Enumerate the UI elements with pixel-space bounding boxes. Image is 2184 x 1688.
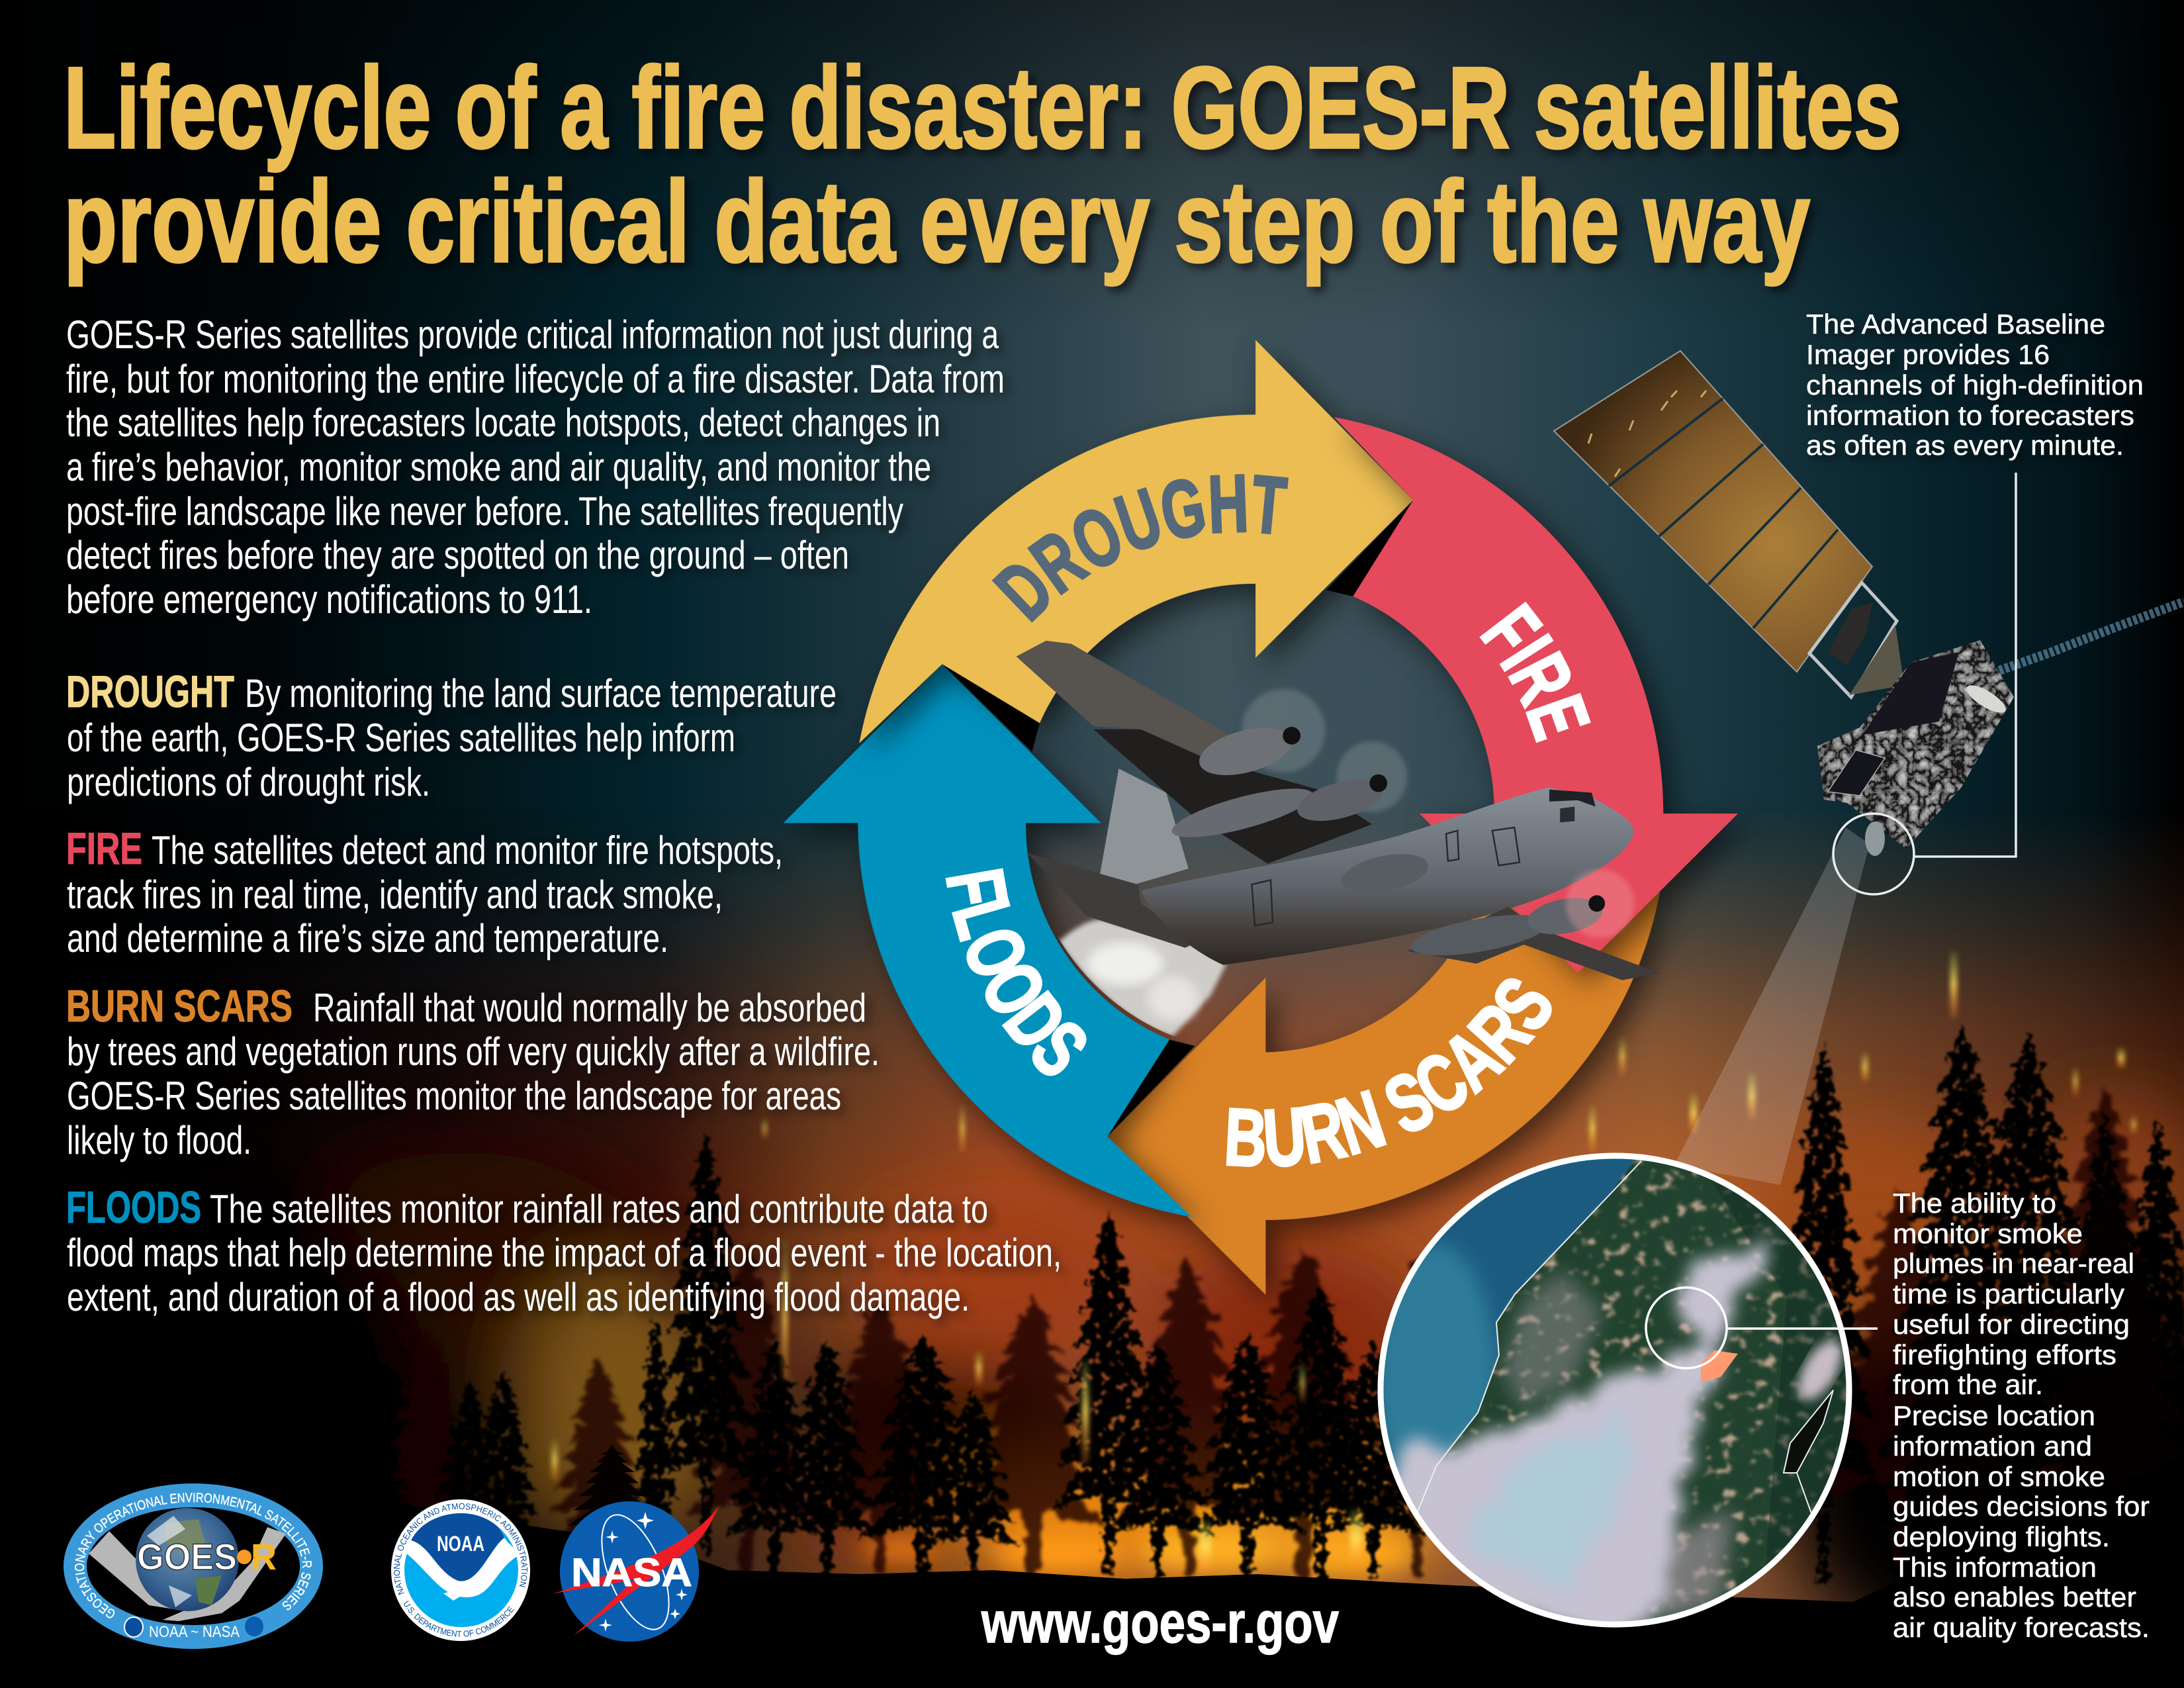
text block: burn scars: Rainfall that would normally be absorbed: [313, 986, 866, 1030]
satellite view of smoke plume: [1377, 1152, 1878, 1635]
arrow: drought: [859, 340, 1413, 743]
intro paragraph: GOES-R Series satellites provide critical information not just during a: [66, 312, 999, 357]
text block: floods: extent, and duration of a flood as well as identifying flood damage.: [67, 1275, 970, 1319]
arrow: burn scars: [1107, 880, 1660, 1295]
logo: goes-r: GEOSTATIONARY OPERATIONAL ENVIRONMENTAL SATELLITE-R SERIES: [73, 1491, 314, 1621]
callout: smoke plume monitoring: [1893, 1188, 2150, 1643]
callout: smoke plume monitoring: information and: [1893, 1430, 2092, 1462]
logo: nasa: [553, 1501, 719, 1642]
text block: drought: predictions of drought risk.: [67, 760, 430, 804]
callout: advanced baseline imager: channels of high-definition: [1806, 369, 2144, 400]
intro paragraph: a fire’s behavior, monitor smoke and air quality, and monitor the: [66, 445, 931, 489]
callout: smoke plume monitoring: plumes in near-real: [1893, 1248, 2134, 1279]
satellite solar array: [1554, 351, 1872, 672]
callout: smoke plume monitoring: Precise location: [1893, 1400, 2095, 1431]
text block: burn scars: [66, 981, 880, 1162]
callout: advanced baseline imager: as often as every minute.: [1806, 430, 2124, 461]
text block: drought: By monitoring the land surface temperature: [245, 671, 837, 716]
callout: smoke plume monitoring: from the air.: [1893, 1369, 2043, 1400]
website url: www.goes-r.gov: [981, 1591, 1339, 1655]
callout: advanced baseline imager: information to forecasters: [1806, 400, 2134, 431]
text block: floods: FLOODS: [66, 1182, 201, 1233]
text block: floods: flood maps that help determine the impact of a flood event - the location,: [67, 1231, 1062, 1275]
callout: smoke plume monitoring: useful for directing: [1893, 1309, 2130, 1340]
callout: smoke plume monitoring: also enables better: [1893, 1581, 2136, 1613]
intro paragraph: before emergency notifications to 911.: [66, 577, 592, 622]
callout: advanced baseline imager: Imager provides 16: [1806, 339, 2050, 370]
label: fire: FIRE: [1465, 589, 1607, 749]
text block: drought: [66, 667, 837, 804]
logo: noaa: NATIONAL OCEANIC AND ATMOSPHERIC ADMINISTRATION: [392, 1501, 529, 1596]
text block: burn scars: likely to flood.: [67, 1118, 251, 1162]
callout: smoke plume monitoring: time is particularly: [1893, 1278, 2124, 1309]
cycle ring of four arrows: [783, 340, 1738, 1295]
intro paragraph: [66, 312, 1005, 622]
arrow: floods: [783, 664, 1191, 1217]
callout: smoke plume monitoring: motion of smoke: [1893, 1461, 2105, 1492]
text block: burn scars: by trees and vegetation runs off very quickly after a wildfire.: [67, 1029, 880, 1074]
logo: goes-r: GOES: [137, 1536, 237, 1577]
text block: drought: DROUGHT: [66, 667, 234, 717]
logo: goes-r: NOAA ~ NASA: [149, 1623, 240, 1641]
callout: smoke plume monitoring: air quality forecasts.: [1893, 1612, 2150, 1643]
label: floods: FLOODS: [929, 863, 1105, 1094]
intro paragraph: the satellites help forecasters locate hotspots, detect changes in: [66, 400, 940, 445]
text block: floods: [66, 1182, 1062, 1319]
arrow: shadow wedges: [942, 500, 1413, 1137]
text block: fire: track fires in real time, identify and track smoke,: [67, 872, 723, 917]
callout: advanced baseline imager: The Advanced Baseline: [1806, 308, 2105, 340]
satellite body and antenna boom: [1809, 583, 2184, 856]
label: drought: DROUGHT: [991, 474, 1289, 623]
callout: smoke plume monitoring: monitor smoke: [1893, 1218, 2083, 1249]
logo: noaa: U.S. DEPARTMENT OF COMMERCE: [401, 1599, 516, 1639]
text block: fire: [66, 823, 783, 961]
text block: drought: of the earth, GOES-R Series satellites help inform: [67, 716, 735, 760]
label: burn scars: BURN SCARS: [1222, 961, 1571, 1184]
arrow: fire: [1334, 417, 1738, 973]
title: [64, 44, 1901, 287]
intro paragraph: fire, but for monitoring the entire lifecycle of a fire disaster. Data from: [66, 357, 1005, 401]
logo: noaa: NOAA: [437, 1532, 484, 1556]
beam from imager to satellite view: [1674, 827, 1870, 1185]
intro paragraph: detect fires before they are spotted on the ground – often: [66, 533, 849, 577]
text block: floods: The satellites monitor rainfall rates and contribute data to: [210, 1187, 988, 1231]
text block: fire: FIRE: [66, 823, 142, 874]
callout: advanced baseline imager: [1806, 308, 2144, 461]
firefighting aircraft dropping retardant: [1017, 641, 1660, 1037]
callout: smoke plume monitoring: deploying flights.: [1893, 1521, 2110, 1552]
logo: noaa: [391, 1499, 530, 1641]
callout: smoke plume monitoring: The ability to: [1893, 1188, 2056, 1219]
text block: fire: and determine a fire’s size and temperature.: [67, 916, 668, 961]
logo: nasa: NASA: [571, 1550, 692, 1595]
callout: smoke plume monitoring: guides decisions for: [1893, 1491, 2150, 1522]
leader line and imager circle: [1833, 473, 2016, 894]
callout: smoke plume monitoring: firefighting efforts: [1893, 1339, 2116, 1370]
callout: smoke plume monitoring: This information: [1893, 1552, 2097, 1583]
text block: burn scars: GOES-R Series satellites monitor the landscape for areas: [67, 1074, 841, 1118]
intro paragraph: post-fire landscape like never before. The satellites frequently: [66, 489, 903, 534]
text block: fire: The satellites detect and monitor fire hotspots,: [152, 828, 783, 872]
text block: burn scars: BURN SCARS: [66, 981, 293, 1031]
logo: goes-r: R: [251, 1536, 277, 1577]
